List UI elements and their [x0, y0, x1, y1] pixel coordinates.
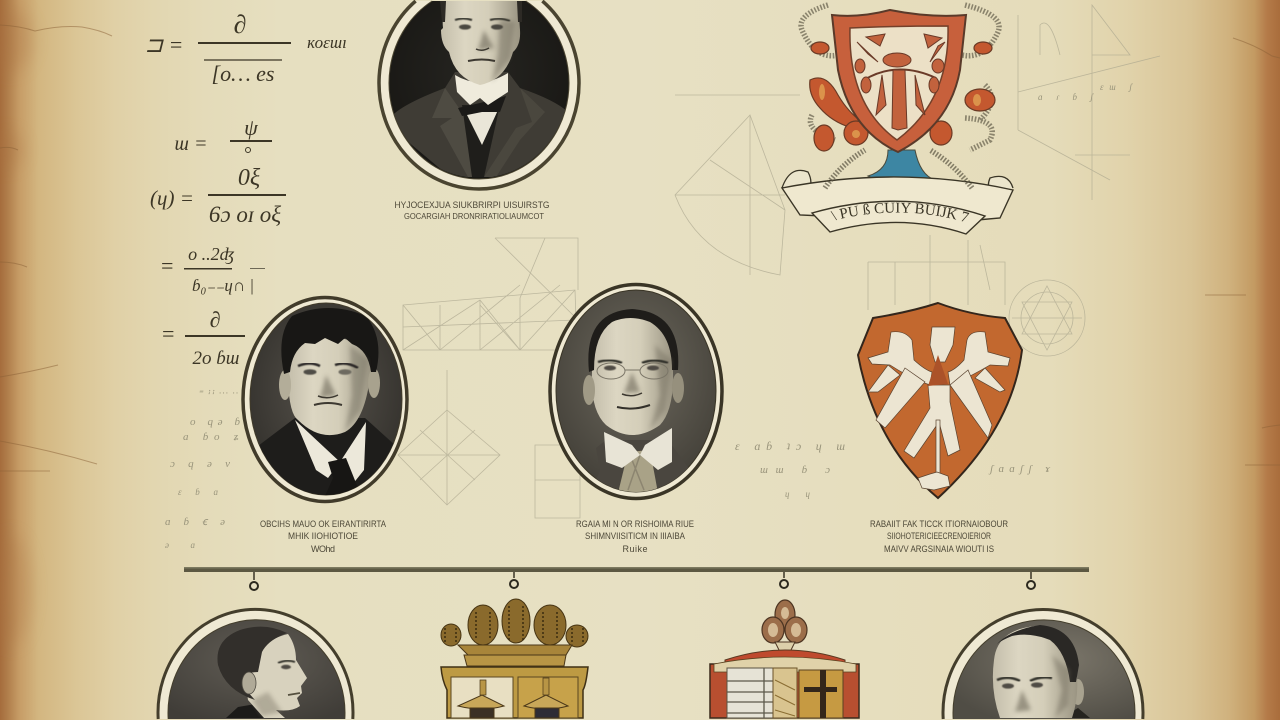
equation 1: ĸoɛɯı — [307, 33, 347, 52]
faint handwritten notes: ʃɑɑʃʃ ɤ — [988, 463, 1051, 475]
crest: top right with scroll: \ PU ß CUIY BUIJK 7 — [830, 202, 970, 222]
equation 5: ∂ — [210, 307, 220, 332]
equation 4: o ..2ʤ — [188, 244, 235, 264]
timeline — [184, 567, 1089, 590]
portrait: bottom right — [943, 609, 1143, 719]
faint handwritten notes: ɛ ɑɓ ʇɔ ɥ ɯ — [735, 439, 845, 453]
caption: eagle shield: SIIOHOTERICIEECRENOIERIOR — [887, 531, 991, 541]
equation 2: ψ — [244, 115, 258, 140]
crest blue base — [868, 150, 935, 187]
caption: centre portrait: RGAIA MI N OR RISHOIMA RIUE — [576, 519, 694, 529]
faint handwritten notes: ɯɯ ɓ ɔ — [760, 464, 830, 476]
faint handwritten notes: ə ɑ — [165, 540, 196, 550]
equation 2: ɯ = — [175, 133, 207, 155]
faint handwritten notes: ⁼ ꜟꜟ ··· ·· — [198, 388, 238, 398]
caption: top portrait: HYJOCEXJUA SIUKBRIRPI UISUIRSTG — [394, 200, 550, 210]
caption: top portrait — [394, 200, 550, 221]
caption: left portrait — [260, 519, 386, 554]
equation 1: [o… es — [212, 61, 274, 86]
caption: left portrait: MHIK IIOHIOTIOE — [288, 531, 358, 541]
faint handwritten notes: ɥɥ — [785, 489, 810, 499]
portrait: top centre — [379, 1, 579, 189]
crest: red and white shield with cross — [710, 600, 859, 718]
faint geometric sketches — [398, 5, 1160, 518]
timeline marker 3 — [780, 572, 788, 588]
equation 4: = — [160, 253, 174, 278]
caption: left portrait: OBCIHS MAUO OK EIRANTIRIRTA — [260, 519, 386, 529]
caption: top portrait: GOCARGIAH DRONRIRATIOLIAUMCOT — [404, 212, 544, 221]
timeline marker 4 — [1027, 572, 1035, 589]
caption: left portrait: WOhd — [311, 544, 335, 554]
caption: eagle shield: MAIVV ARGSINAIA WIOUTI IS — [884, 544, 994, 554]
equation 2 — [175, 115, 272, 155]
shield: eagle — [858, 303, 1022, 498]
equation 4 — [160, 244, 265, 295]
faint handwritten notes: a ɓo ʑ — [183, 431, 239, 443]
equation 5: 2o ɓɯ — [193, 348, 239, 369]
equation 3 — [150, 165, 286, 227]
crest: top right with scroll — [780, 2, 1014, 235]
faint handwritten notes: o qə ɓ — [190, 416, 240, 428]
crest: golden crown and shield — [441, 599, 588, 718]
equation 1: ∂ — [234, 10, 246, 39]
equation 4: ɓ₀₋₋ɥ∩ | — [192, 276, 254, 295]
timeline marker 2 — [510, 572, 518, 588]
faint handwritten notes: ɑ ɓ ꞓ ə — [165, 516, 225, 528]
equation 5 — [161, 307, 245, 369]
faint handwritten notes: ɛɯ ʃ — [1100, 82, 1133, 92]
equation 1: ⊐ = — [145, 32, 183, 57]
caption: eagle shield — [870, 519, 1008, 554]
caption: centre portrait: Ruike — [622, 544, 648, 554]
crest shield — [832, 10, 966, 152]
faint handwritten notes — [165, 82, 1133, 550]
caption: eagle shield: RABAIIT FAK TICCK ITIORNAIOBOUR — [870, 519, 1008, 529]
crest flowers — [810, 42, 995, 151]
timeline marker 1 — [250, 572, 258, 590]
equation 3: 6ɔ oɪ oξ — [209, 202, 281, 227]
caption: centre portrait — [576, 519, 694, 554]
portrait: bottom left profile — [158, 609, 353, 719]
equation 1 — [145, 10, 347, 86]
caption: centre portrait: SHIMNVIISITICM IN IIIAIBA — [585, 531, 685, 541]
portrait: centre middle — [550, 284, 722, 498]
portrait: left middle — [243, 298, 407, 502]
crest scroll — [782, 170, 1013, 198]
equation 5: = — [161, 321, 175, 346]
faint handwritten notes: ɔ q ə v — [170, 458, 230, 470]
equation 3: (ɥ) = — [150, 186, 194, 210]
crest mantling — [801, 5, 999, 150]
faint handwritten notes: ɛ ɓ ɑ — [178, 487, 218, 497]
faint handwritten notes: ɑ ɾ ɓ ʃ — [1038, 92, 1094, 102]
equation 3: 0ξ — [238, 165, 261, 191]
